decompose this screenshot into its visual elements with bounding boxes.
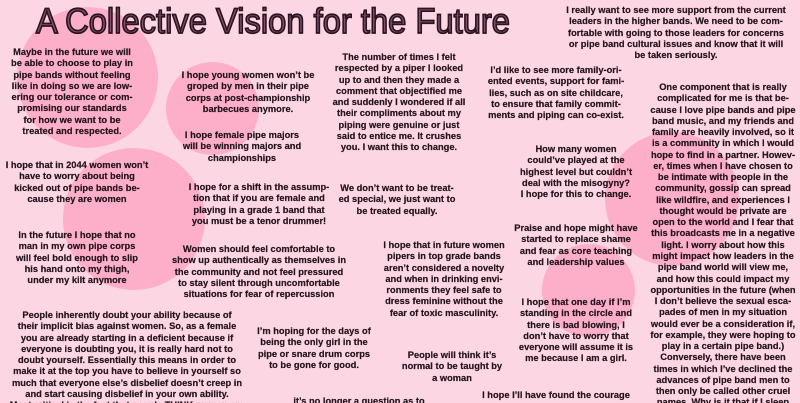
text: one component: community, gossip can spread [655,183,791,193]
text: how many women: deal with the misogyny? [522,178,630,188]
text: one component: hope to find in a partner. Howev- [651,150,795,160]
text: top grade bands: dress feminine without the [385,296,503,306]
text: standing in the circle: I hope that one day if I’m [521,297,630,307]
text: top grade bands: pipers in top grade bands [387,251,501,261]
text: treated equally [338,183,456,216]
text: maybe in the future: be able to choose to play in [11,58,133,68]
text: women should feel comfortable: to stay silent through uncomfortable [178,278,340,288]
text: taught by a woman: a woman [432,373,472,383]
text: top grade bands: fear of toxic masculinity. [390,308,498,318]
text: young women: I hope young women won’t be [182,70,314,80]
text: how many women: How many women [535,144,617,154]
text: implicit bias: People inherently doubt your ability because of [22,310,232,320]
text: maybe in the future: treated and respected. [22,126,122,136]
text: implicit bias: and start causing disbelief in your own ability. [25,389,229,399]
text: one component: be intimate with people in the [658,172,788,182]
text: family-oriented events: lies, such as on site childcare, [489,88,623,98]
text: maybe in the future: for how we want to be [23,115,121,125]
text: respected by a piper: and suddenly I wondered if all [333,97,465,107]
text: shift in the assumption: you must be a tenor drummer! [192,216,326,226]
text: in the future: man in my own pipe corps [19,241,135,251]
text: praise and hope [514,223,638,268]
text: maybe in the future [11,47,133,136]
text: one component: I don’t believe the sexual esca- [655,296,791,306]
text: shift in the assumption [189,182,329,226]
text: family-oriented events [488,65,624,120]
text: one component: this broadcasts me in a negative [651,228,795,238]
text: one component: opportunities in the future (when [650,285,796,295]
text: family-oriented events: ments and piping can co-exist. [488,110,624,120]
text: praise and hope: and leadership values [527,257,625,267]
text: maybe in the future: Maybe in the future we will [13,47,131,57]
text: respected by a piper [332,52,465,152]
text: 2044: I hope that in 2044 women won’t [6,160,148,170]
circle: right [605,132,739,266]
text: maybe in the future: ering our tolerance or com- [12,92,132,102]
text: women should feel comfortable: situations for fear of repercussion [184,289,334,299]
text: respected by a piper: up to and then they made a [339,75,459,85]
text: standing in the circle [519,297,633,364]
circle: middle left [63,148,205,290]
text: taught by a woman: normal to be taught by [402,361,502,371]
text: respected by a piper: you. I want this to change. [341,142,457,152]
text: only girl in the corps: being the only girl in the [260,337,368,347]
text: young women [182,70,314,114]
text: maybe in the future: promising our standards [17,103,127,113]
text: one component: family are heavily involved, so it [652,127,794,137]
text: young women: barbecues anymore. [203,104,293,114]
text: one component: is a community in which I would [652,138,794,148]
text: standing in the circle: standing in the circle and [520,308,632,318]
text: shift in the assumption: playing in a grade 1 band that [193,205,325,215]
text: respected by a piper: piping were genuine or just [339,120,459,130]
text: shift in the assumption: I hope for a shift in the assump- [189,182,329,192]
text: one component: might impact how leaders in the [652,251,794,261]
text: family-oriented events: ented events, support for fami- [488,76,624,86]
title: A Collective Vision for the Future [36,1,510,41]
text: found the courage: I hope I’ll have found the courage [482,390,630,400]
text: female pipe majors: will be winning majors and [183,141,301,151]
text: support from leaders: leaders in the higher bands. We need to be com- [569,16,783,26]
text: top grade bands: I hope that in future women [383,240,505,250]
text: women should feel comfortable [172,244,346,300]
text: in the future: will feel bold enough to slip [16,253,138,263]
text: treated equally: We don’t want to be treat- [340,183,454,193]
text: one component: like wildfire, and experiences I [656,195,790,205]
text: praise and hope: Praise and hope might have [514,223,638,233]
text: one component: Conversely, there have been [660,352,786,362]
text: family-oriented events: to ensure that family commit- [491,99,621,109]
text: taught by a woman: People will think it’s [408,350,496,360]
text: standing in the circle: don’t have to worry that [523,331,629,341]
text: top grade bands: and when in drinking envi- [385,274,503,284]
text: female pipe majors: I hope female pipe majors [185,130,299,140]
circle: upper centre left [166,62,259,155]
text: one component: er, times when I have chosen to [653,161,793,171]
text: praise and hope: started to replace shame [521,234,631,244]
text: implicit bias: much that everyone else’s disbelief doesn’t creep in [12,378,242,388]
text: in the future [16,230,138,286]
text: maybe in the future: like in doing so we are low- [12,81,132,91]
text: one component [650,82,796,403]
text: women should feel comfortable: show up authentically as themselves in [172,255,346,265]
circle: top left [17,7,158,148]
text: female pipe majors [182,130,301,164]
text: support from leaders: be taken seriously. [634,50,718,60]
text: one component: band music, and my friends and [652,116,794,126]
text: female pipe majors: championships [208,153,276,163]
text: treated equally: be treated equally. [357,206,437,216]
circle: lower centre right [542,244,635,337]
text: implicit bias: doubt yourself. Essentially this means in order to [18,355,236,365]
text: young women: corps at post-championship [186,93,310,103]
text: one component: pades of men in my situation [659,307,787,317]
text: how many women: could’ve played at the [527,155,625,165]
text: one component: open to the world and I fear that [652,217,794,227]
text: standing in the circle: me because I am a girl. [525,353,627,363]
text: 2044 [6,160,148,204]
text: 2044: have to worry about being [19,171,135,181]
text: one component: complicated for me is that be- [657,93,789,103]
text: only girl in the corps: I’m hoping for the days of [257,326,371,336]
text: implicit bias: everyone is doubting you, it is really hard not to [21,344,233,354]
text: one component: for example, they were hoping to [650,330,796,340]
text: standing in the circle: everyone will assume it is [519,342,633,352]
text: one component: light. I worry about how this [661,240,785,250]
text: respected by a piper: comment that objectified me [336,86,462,96]
text: implicit bias: you are already starting in a deficient because if [21,333,233,343]
text: one component: advances of pipe band men to [656,375,790,385]
text: standing in the circle: there is bad blowing, I [527,320,625,330]
text: young women: groped by men in their pipe [187,81,309,91]
text: one component: One component that is really [659,82,787,92]
text: one component: cause I love pipe bands and pipe [650,105,796,115]
text: one component: play in a certain pipe band.) [662,341,784,351]
text: 2044: kicked out of pipe bands be- [14,183,140,193]
text: family-oriented events: I’d like to see more family-ori- [490,65,622,75]
text: one component: and how this could impact my [657,274,789,284]
text: implicit bias: make it at the top you have to believe in yourself so [13,366,241,376]
text: how many women: I hope for this to change. [521,189,631,199]
text: in the future: under my kilt anymore [27,275,127,285]
text: one component: would ever be a consideration if, [651,319,795,329]
text: only girl in the corps: to be gone for good. [269,360,359,370]
text: women should feel comfortable: the community and not feel pressured [175,267,343,277]
text: how many women: highest level but couldn’t [520,167,632,177]
text: top grade bands: ronments they feel safe to [386,285,502,295]
text: in the future: In the future I hope that no [18,230,136,240]
text: in the future: his hand onto my thigh, [25,264,129,274]
text: top grade bands: aren’t considered a novelty [384,263,504,273]
text: respected by a piper: The number of times I felt [342,52,456,62]
text: support from leaders: or pipe band cultural issues and know that it will [569,39,783,49]
text: one component: then only be called other cruel [656,386,790,396]
text: praise and hope: and fear as core teaching [520,246,632,256]
text: top grade bands [383,240,505,318]
text: respected by a piper: said to entice me. It crushes [337,131,461,141]
text: only girl in the corps: pipe or snare drum corps [258,349,370,359]
text: maybe in the future: pipe bands without feeling [13,70,131,80]
text: treated equally: ed special, we just want to [339,194,455,204]
text: one component: pipe band world will view me, [658,262,788,272]
text: 2044: cause they are women [27,194,127,204]
text: implicit bias [10,310,244,403]
text: taught by a woman [402,350,502,383]
text: support from leaders: fortable with going to those leaders for concerns [568,28,784,38]
text: only girl in the corps [257,326,371,370]
text: support from leaders [566,5,786,60]
text: support from leaders: I really want to see more support from the current [566,5,786,15]
text: how many women [520,144,632,200]
text: women should feel comfortable: Women should feel comfortable to [183,244,335,254]
text: implicit bias: their implicit bias against women. So, as a female [18,321,236,331]
text: respected by a piper: their compliments about my [337,108,461,118]
text: respected by a piper: respected by a piper I looked [335,63,463,73]
text: one component: times in which I’ve declined the [654,364,792,374]
text: one component: thought would be private are [659,206,787,216]
text: shift in the assumption: tion that if you are female and [193,193,325,203]
